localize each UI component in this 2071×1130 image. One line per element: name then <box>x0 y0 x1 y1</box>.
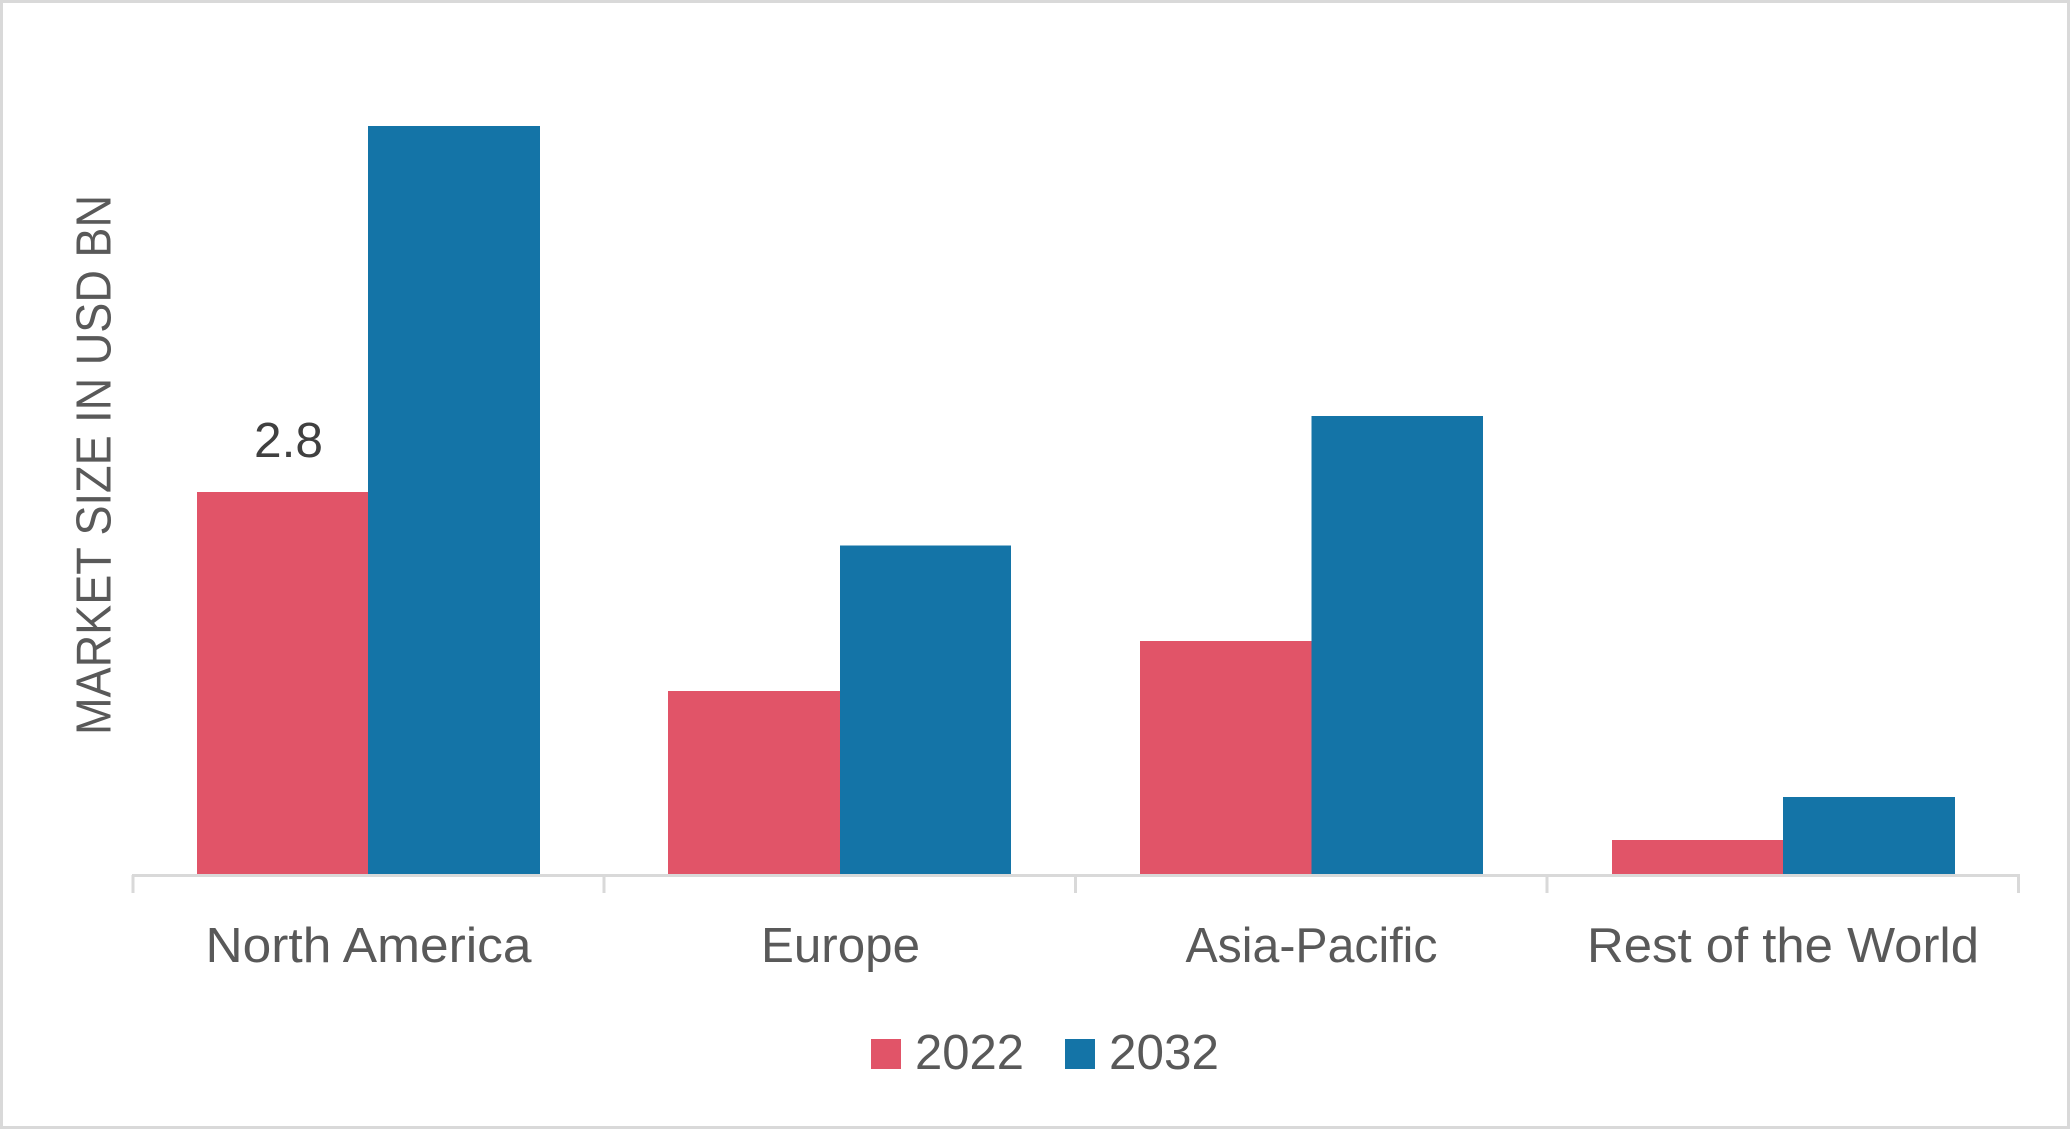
legend item: 2032: 2032 <box>1109 1026 1219 1080</box>
bars: Europe <box>668 546 1011 874</box>
bars: Asia-Pacific <box>1140 416 1483 874</box>
category label: North America: North America <box>206 919 532 973</box>
bars: North America <box>197 126 540 874</box>
y axis title: MARKET SIZE IN USD BN <box>68 195 122 735</box>
bars: Rest of the World <box>1612 797 1955 874</box>
x axis <box>132 875 2020 893</box>
category label: Asia-Pacific: Asia-Pacific <box>1186 919 1438 973</box>
legend <box>871 1026 1219 1080</box>
legend item: 2022: 2022 <box>915 1026 1024 1080</box>
data label: North America 2022: 2.8 <box>254 414 323 468</box>
category label: Rest of the World: Rest of the World <box>1587 919 1979 973</box>
category label: Europe: Europe <box>761 919 920 973</box>
